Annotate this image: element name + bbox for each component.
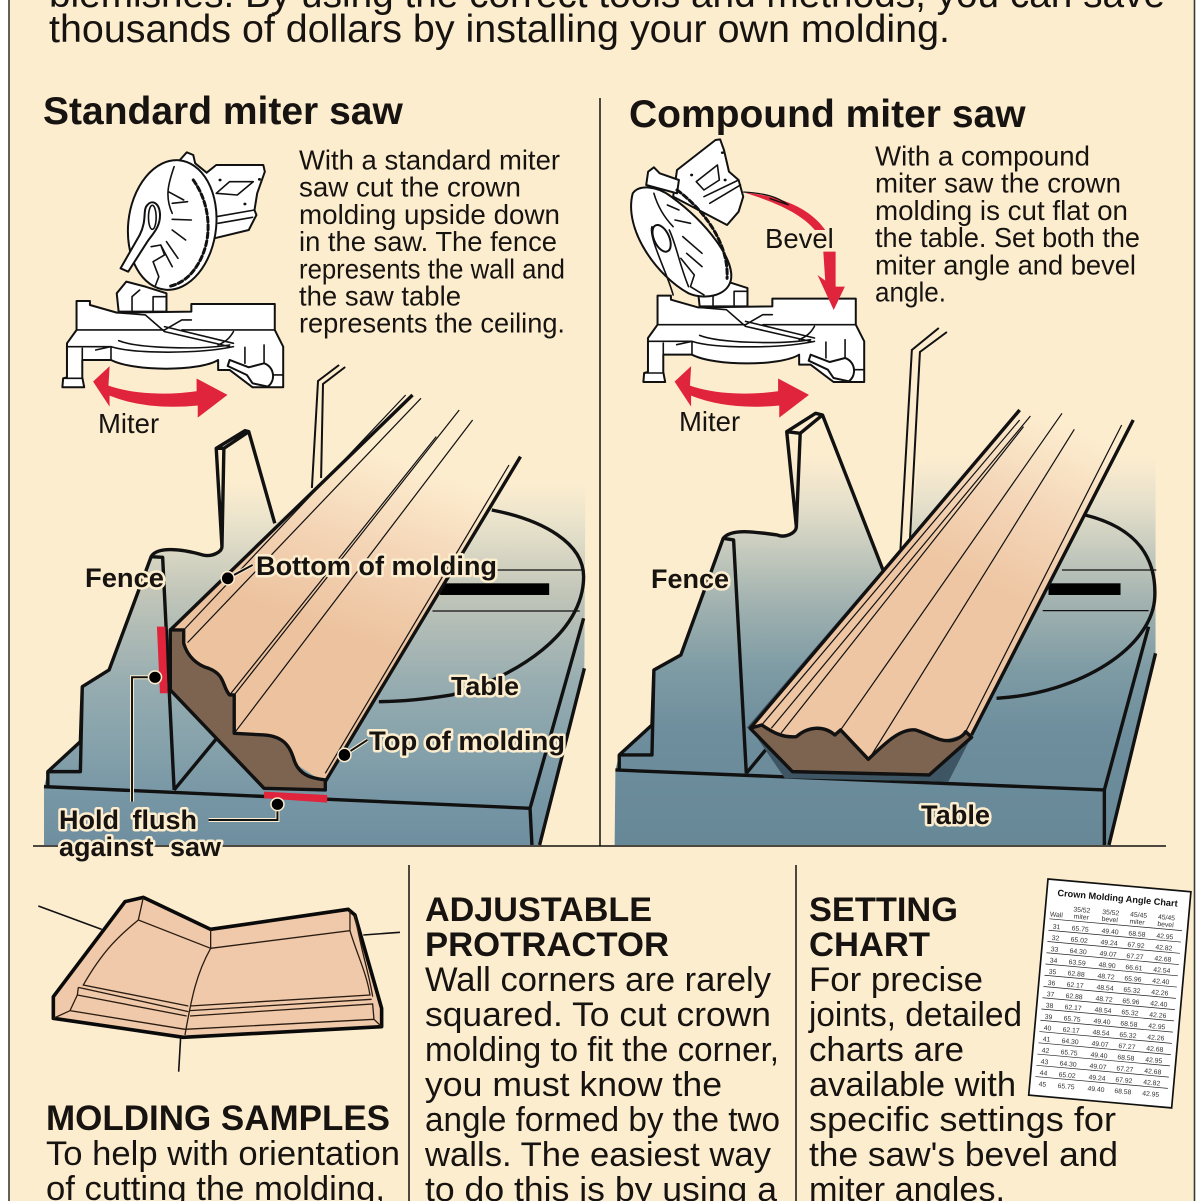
crown molding angle chart: Wall [1050,911,1064,919]
molding face [170,395,520,783]
crown molding angle chart: 42.95 [1145,1057,1163,1065]
text: adjustable protractor: squared. To cut crown [425,996,771,1034]
intro text [49,0,1165,51]
text: setting chart: charts are [809,1031,964,1069]
crown molding angle chart: 65.96 [1122,998,1140,1006]
text: molding samples [46,1135,400,1201]
crown molding angle chart: miter [1129,918,1146,927]
crown molding angle chart: 49.24 [1088,1074,1106,1083]
crown molding angle chart: 42.40 [1150,1000,1168,1009]
crown molding angle chart: 36 [1047,980,1056,988]
illustration: molding sample corner [38,897,400,1072]
crown molding angle chart: 67.92 [1115,1077,1133,1085]
crown molding angle chart: 35 [1048,969,1057,976]
text: compound miter saw description: miter angle and bevel [875,249,1136,280]
diagram: standard saw with molding [44,365,586,845]
heading: compound miter saw: Compound miter saw [629,93,1026,136]
table edges [44,618,584,845]
crown molding angle chart: 65.75 [1063,1015,1081,1024]
arrow: bevel [743,192,845,310]
leader lines [132,565,367,820]
fence outline [619,413,883,773]
crown molding angle chart: 68.58 [1120,1020,1138,1029]
text: setting chart: joints, detailed [808,996,1022,1034]
text: standard miter saw description: represents the ceiling. [299,308,565,339]
crown molding angle chart: 65.02 [1058,1072,1076,1080]
crown molding angle chart: 42.68 [1144,1068,1162,1076]
crown molding angle chart: 42.68 [1146,1045,1164,1054]
red contact bars [157,627,327,803]
diagram: compound saw with molding [615,328,1156,845]
text: compound miter saw description: the table. Set both the [875,222,1140,253]
crown molding angle chart: 49.40 [1093,1018,1111,1027]
crown molding angle chart: Crown Molding Angle Chart [1057,888,1178,909]
crown molding angle chart: 65.96 [1124,975,1142,984]
table circle [379,510,584,702]
crown molding angle chart: 45/45 [1130,911,1148,920]
crown molding angle chart: 44 [1039,1070,1048,1078]
crown molding angle chart: 48.90 [1098,962,1116,970]
crown molding angle chart: 67.92 [1127,942,1145,950]
molding lines [170,395,520,782]
crown molding angle chart: 42.68 [1154,955,1172,964]
crown molding angle chart: 42.54 [1153,967,1171,975]
crown molding angle chart: 39 [1044,1014,1053,1021]
fence and table fill [44,431,586,845]
crown molding angle chart: 31 [1052,924,1061,931]
crown molding angle chart: 42.26 [1147,1034,1165,1043]
crown molding angle chart: 49.07 [1089,1063,1107,1072]
text: standard miter saw description: in the saw. The fence [299,226,557,257]
icon: miter arrow compound saw [675,367,808,417]
label: hold flush against saw: Hold flush [59,805,197,835]
label: hold flush against saw: against saw [59,832,222,862]
crown molding angle chart: 42.26 [1151,989,1169,998]
crown molding angle chart: 68.58 [1114,1088,1132,1096]
crown molding angle chart: 62.17 [1066,982,1084,990]
crown molding angle chart: 45 [1038,1081,1047,1089]
text: standard miter saw description [299,144,565,339]
table circle [997,515,1155,698]
crown molding angle chart: 65.75 [1071,925,1089,934]
text: molding samples: To help with orientation [46,1135,400,1173]
crown molding angle chart: 65.75 [1060,1049,1078,1058]
crown molding angle chart: 42.95 [1156,933,1174,941]
crown molding angle chart: 65.32 [1123,987,1141,995]
crown molding angle chart: 32 [1051,935,1060,943]
text: adjustable protractor [424,961,780,1201]
vertical dividers lower section [409,865,796,1201]
crown molding angle chart: 49.40 [1090,1052,1108,1060]
label: bevel: Bevel [765,223,834,254]
crown molding angle chart: 35/52 [1073,906,1091,915]
label: top of molding: Top of molding [369,726,565,756]
text: setting chart: available with [809,1066,1016,1104]
crown molding angle chart: 68.58 [1117,1054,1135,1063]
crown molding angle chart: 42.95 [1148,1023,1166,1031]
heading: setting chart: SETTING [809,891,958,929]
icon: compound miter saw [631,139,864,382]
crown molding angle chart: 48.54 [1094,1007,1112,1015]
molding face [750,410,1133,758]
crown molding angle chart: 64.30 [1069,948,1087,956]
crown molding angle chart: 34 [1049,957,1058,965]
text: adjustable protractor: Wall corners are rarely [425,961,772,999]
heading: standard miter saw: Standard miter saw [43,90,403,133]
crown molding angle chart: 37 [1046,991,1055,999]
back fence lines [900,328,947,552]
crown molding angle chart: 43 [1040,1059,1049,1066]
text: standard miter saw description: represents the wall and [299,253,565,284]
text: standard miter saw description: molding upside down [299,199,560,230]
molding end profile [170,630,325,790]
crown molding angle chart: 45/45 [1158,914,1175,922]
vertical divider between saws [599,98,601,846]
crown molding angle chart: 67.27 [1116,1065,1134,1074]
saw blade and motor tilted [631,139,743,297]
crown molding angle chart: 48.72 [1095,996,1113,1004]
crown molding angle chart: bevel [1101,916,1119,924]
crown molding angle chart: 49.40 [1101,928,1119,936]
crown molding angle chart: 65.32 [1119,1032,1137,1040]
crown molding angle chart: 66.61 [1125,964,1143,973]
crown molding angle chart: 64.30 [1059,1060,1077,1069]
crown molding angle chart: 49.07 [1099,950,1117,959]
crown molding angle chart: 62.17 [1062,1027,1080,1035]
crown molding angle chart: 49.40 [1087,1086,1105,1094]
molding shadow [746,567,972,782]
crown molding angle chart: 65.02 [1070,937,1088,945]
text: setting chart: the saw's bevel and [809,1136,1118,1174]
label: bottom of molding: Bottom of molding [256,551,497,581]
crown molding angle chart: 49.24 [1100,939,1118,948]
intro text: thousands of dollars by installing your own molding. [49,8,950,51]
heading: setting chart: CHART [809,926,930,964]
icon: miter arrow standard saw [94,367,227,417]
horizontal divider [33,845,1166,847]
crown molding angle chart: 48.72 [1097,973,1115,982]
text: adjustable protractor: molding to fit the corner, [425,1031,779,1069]
text: setting chart: specific settings for [809,1101,1116,1139]
crown molding angle chart [1029,879,1191,1108]
text: compound miter saw description: With a compound [875,140,1090,172]
crown molding angle chart: 35/52 [1102,909,1120,917]
crown molding angle chart: 42.95 [1142,1090,1160,1099]
crown molding angle chart: 48.54 [1096,984,1114,993]
label: miter compound: Miter [679,406,740,437]
heading: setting chart [809,891,958,964]
molding end profile [750,725,972,775]
heading: molding samples: MOLDING SAMPLES [46,1099,390,1138]
crown molding angle chart: 49.07 [1091,1041,1109,1049]
text: adjustable protractor: angle formed by the two [425,1101,780,1139]
text: adjustable protractor: walls. The easiest way [424,1136,772,1174]
label: fence compound: Fence [651,564,729,594]
fence outline [48,431,275,790]
heading: adjustable protractor: ADJUSTABLE [425,891,652,929]
table edges [615,627,1156,845]
label: table standard: Table [451,671,519,701]
crown molding angle chart: 64.30 [1061,1038,1079,1046]
molding lines [750,410,1133,735]
crown molding angle chart: 42 [1041,1047,1050,1055]
crown molding angle chart: bevel [1157,921,1174,929]
crown molding angle chart: 38 [1045,1002,1054,1010]
label: fence standard: Fence [85,563,164,593]
crown molding angle chart: 42.82 [1155,944,1173,953]
crown molding angle chart: 48.54 [1092,1029,1110,1038]
fence and table fill [615,413,1156,845]
crown molding angle chart: 42.82 [1143,1079,1161,1088]
crown molding angle chart: 67.27 [1126,953,1144,961]
text: adjustable protractor: you must know the [425,1066,722,1104]
crown molding angle chart: 67.27 [1118,1043,1136,1051]
label: hold flush against saw [59,805,222,862]
back fence lines [312,365,345,488]
crown molding angle chart: 68.58 [1128,930,1146,939]
text: compound miter saw description: molding is cut flat on [875,195,1128,226]
crown molding angle chart: 63.59 [1068,959,1086,968]
crown molding angle chart: 62.88 [1065,993,1083,1001]
crown molding angle chart: 33 [1050,946,1059,954]
crown molding angle chart: 42.26 [1149,1012,1167,1020]
text: standard miter saw description: the saw table [299,280,461,312]
heading: adjustable protractor [425,891,669,964]
crown molding angle chart: 65.32 [1121,1009,1139,1018]
text: compound miter saw description [875,140,1140,308]
icon: standard miter saw [62,152,283,387]
crown molding angle chart: 40 [1043,1025,1052,1033]
text: setting chart: For precise [809,961,983,999]
label: table compound: Table [921,800,990,830]
crown molding angle chart: miter [1073,913,1090,922]
text: standard miter saw description: With a standard miter [299,144,560,176]
text: compound miter saw description: miter saw the crown [875,168,1121,199]
crown molding angle chart: 65.75 [1057,1083,1075,1091]
crown molding angle chart: 42.40 [1152,978,1170,986]
crown molding angle chart: 41 [1042,1036,1051,1044]
saw base [643,276,864,382]
crown molding angle chart: 62.17 [1064,1004,1082,1013]
heading: adjustable protractor: PROTRACTOR [425,926,669,964]
text: setting chart [808,961,1118,1201]
crown molding angle chart: 62.88 [1067,970,1085,979]
text: compound miter saw description: angle. [875,276,946,308]
text: standard miter saw description: saw cut the crown [299,172,521,203]
label: miter standard: Miter [98,408,159,439]
